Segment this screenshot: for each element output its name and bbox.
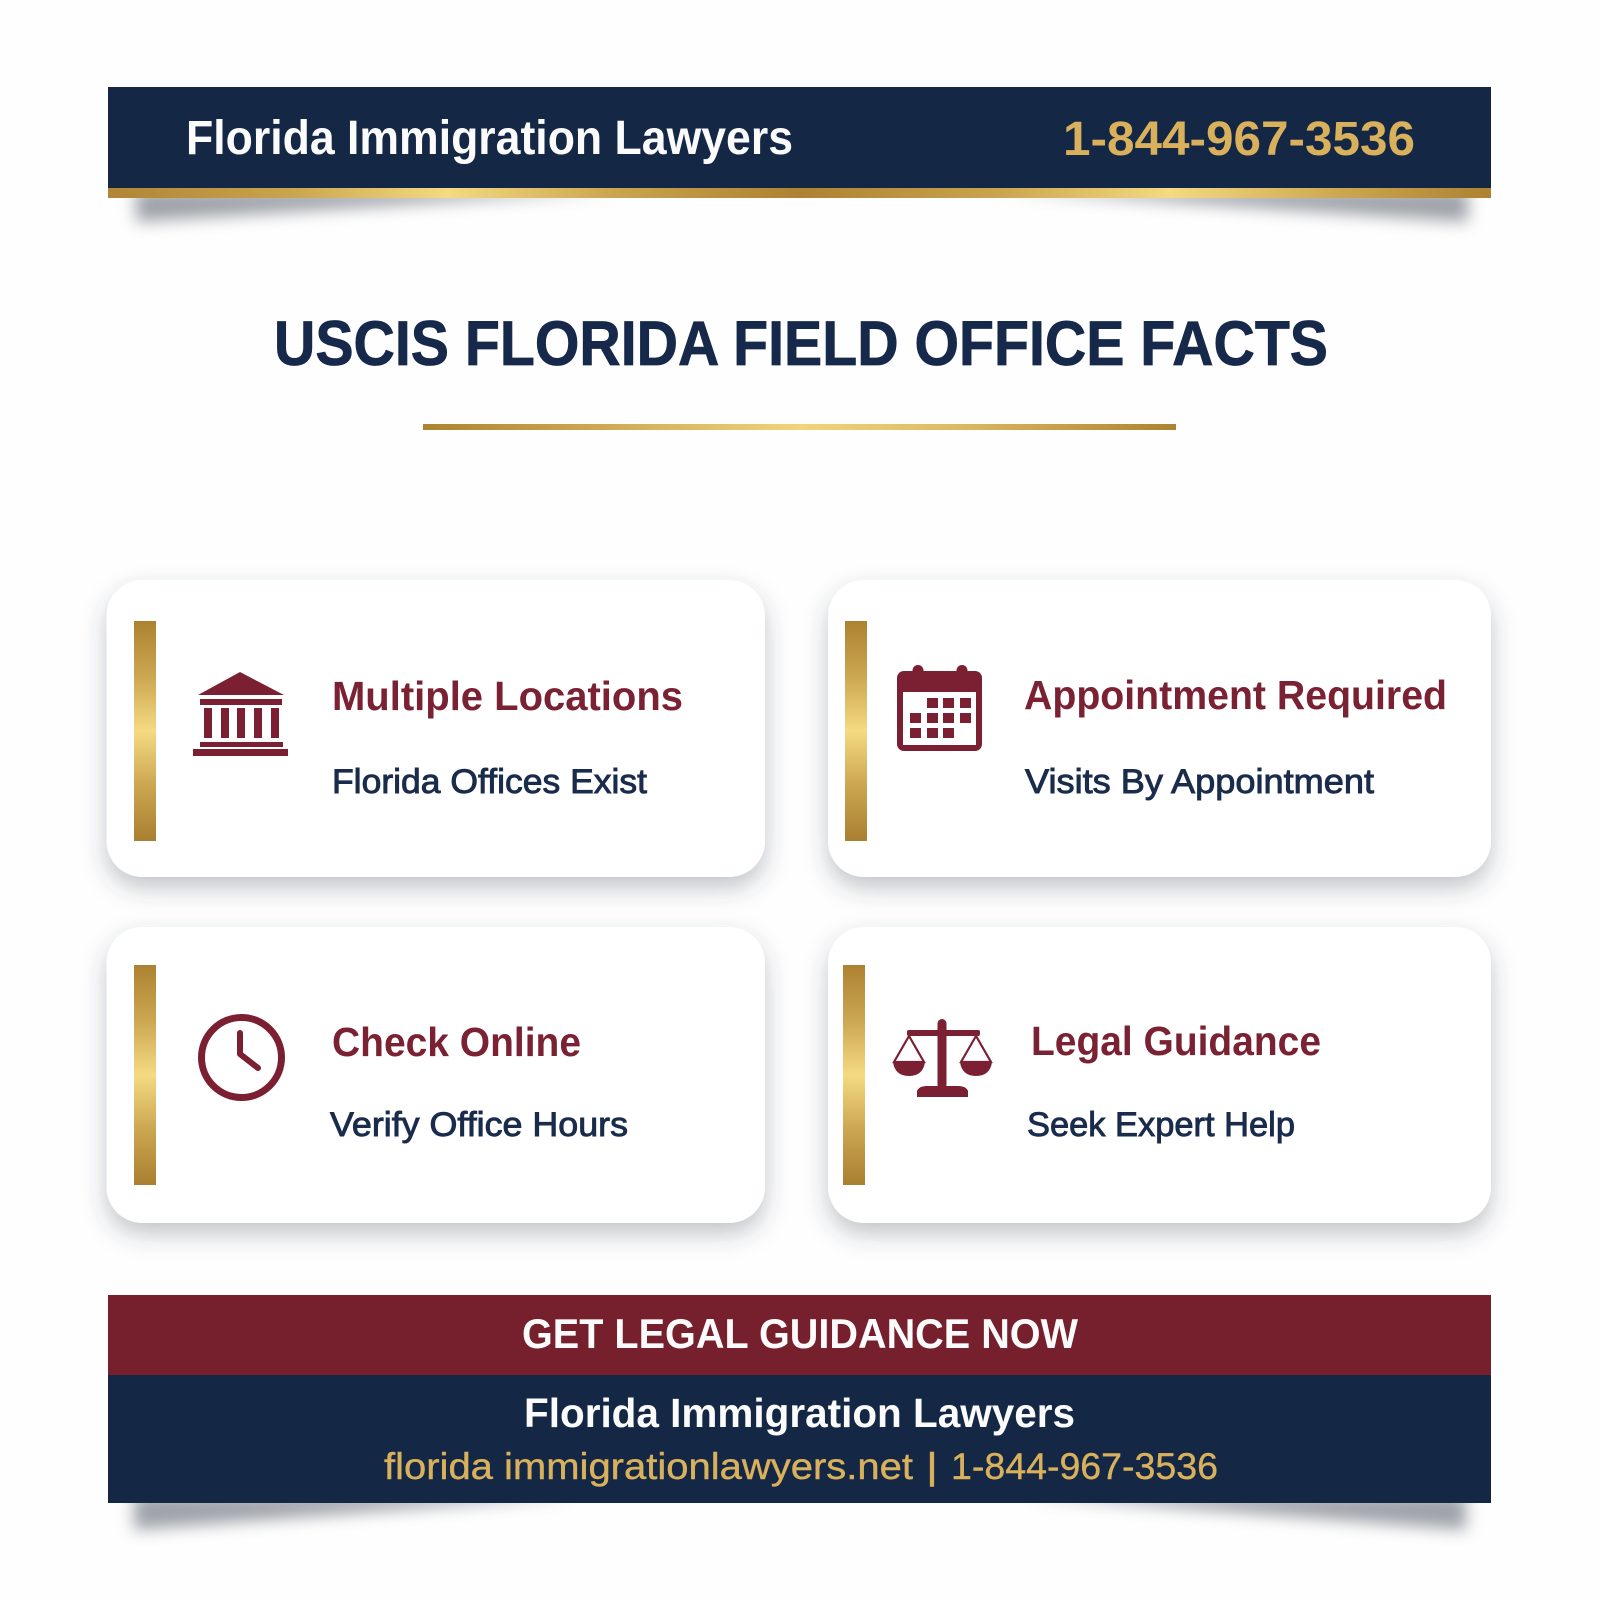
website and phone: 1-844-967-3536	[951, 1446, 1218, 1487]
firm name: Florida Immigration Lawyers	[186, 112, 793, 165]
website and phone	[384, 1446, 1218, 1487]
footer banner	[108, 1295, 1491, 1530]
icon: scales of justice	[893, 1019, 992, 1097]
panel: appointment required	[828, 580, 1491, 877]
icon: calendar	[897, 665, 982, 751]
website and phone: florida immigrationlawyers.net	[384, 1446, 914, 1487]
firm name: Florida Immigration Lawyers	[524, 1390, 1075, 1436]
heading: Check Online	[332, 1019, 581, 1065]
panel: multiple locations	[106, 580, 765, 877]
title: USCIS FLORIDA FIELD OFFICE FACTS	[274, 309, 1328, 379]
heading: Legal Guidance	[1031, 1018, 1321, 1064]
heading: Multiple Locations	[332, 673, 683, 719]
description: Florida Offices Exist	[332, 763, 648, 801]
icon: courthouse	[193, 672, 288, 756]
description: Visits By Appointment	[1025, 763, 1375, 801]
panel: legal guidance	[828, 927, 1491, 1223]
panel: check online	[106, 927, 765, 1223]
call to action: GET LEGAL GUIDANCE NOW	[522, 1310, 1078, 1357]
description: Seek Expert Help	[1027, 1106, 1295, 1144]
phone number: 1-844-967-3536	[1063, 113, 1415, 166]
title underline	[423, 424, 1176, 430]
website and phone: |	[926, 1446, 938, 1487]
icon: clock	[202, 1018, 282, 1098]
heading: Appointment Required	[1024, 672, 1447, 718]
description: Verify Office Hours	[330, 1106, 628, 1144]
header banner	[108, 87, 1491, 222]
